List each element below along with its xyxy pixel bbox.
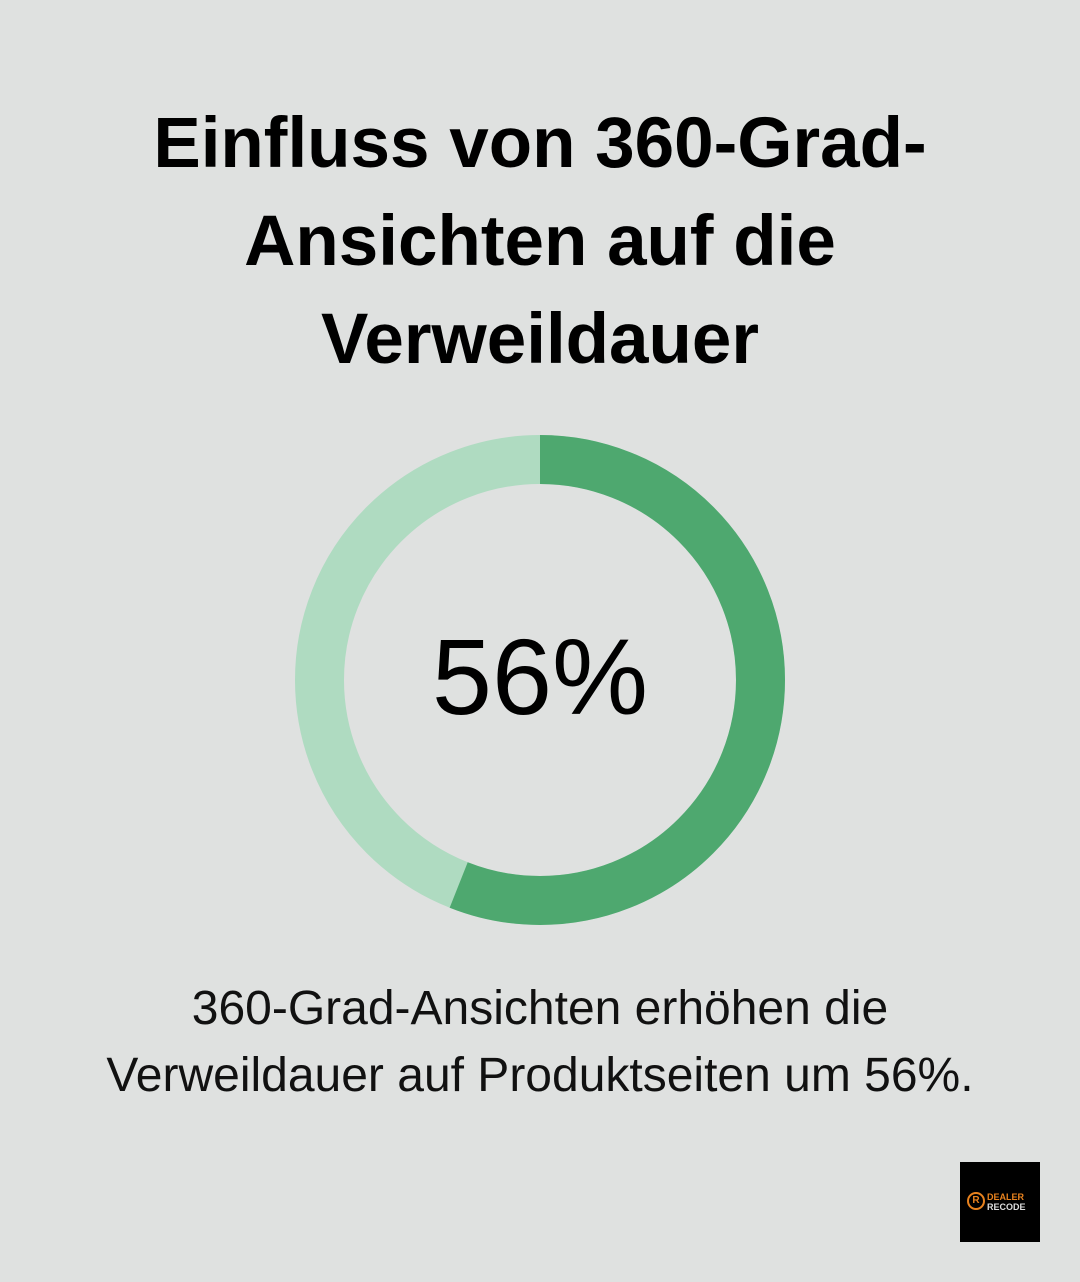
caption: Verweildauer auf Produktseiten um 56%. xyxy=(106,1049,974,1102)
logo text: DEALER xyxy=(987,1192,1024,1202)
title: Ansichten auf die xyxy=(244,202,836,281)
ring value arc 56% xyxy=(320,460,760,900)
title xyxy=(153,104,927,379)
caption: 360-Grad-Ansichten erhöhen die xyxy=(192,982,888,1035)
logo text: RECODE xyxy=(987,1202,1026,1212)
title: Einfluss von 360-Grad- xyxy=(153,104,927,183)
center value: 56% xyxy=(432,616,648,737)
ring background xyxy=(320,460,760,900)
caption xyxy=(106,982,974,1102)
logo icon xyxy=(967,1192,985,1210)
logo icon: R xyxy=(972,1195,980,1206)
logo xyxy=(960,1162,1040,1242)
logo text xyxy=(987,1192,1026,1212)
title: Verweildauer xyxy=(321,300,759,379)
